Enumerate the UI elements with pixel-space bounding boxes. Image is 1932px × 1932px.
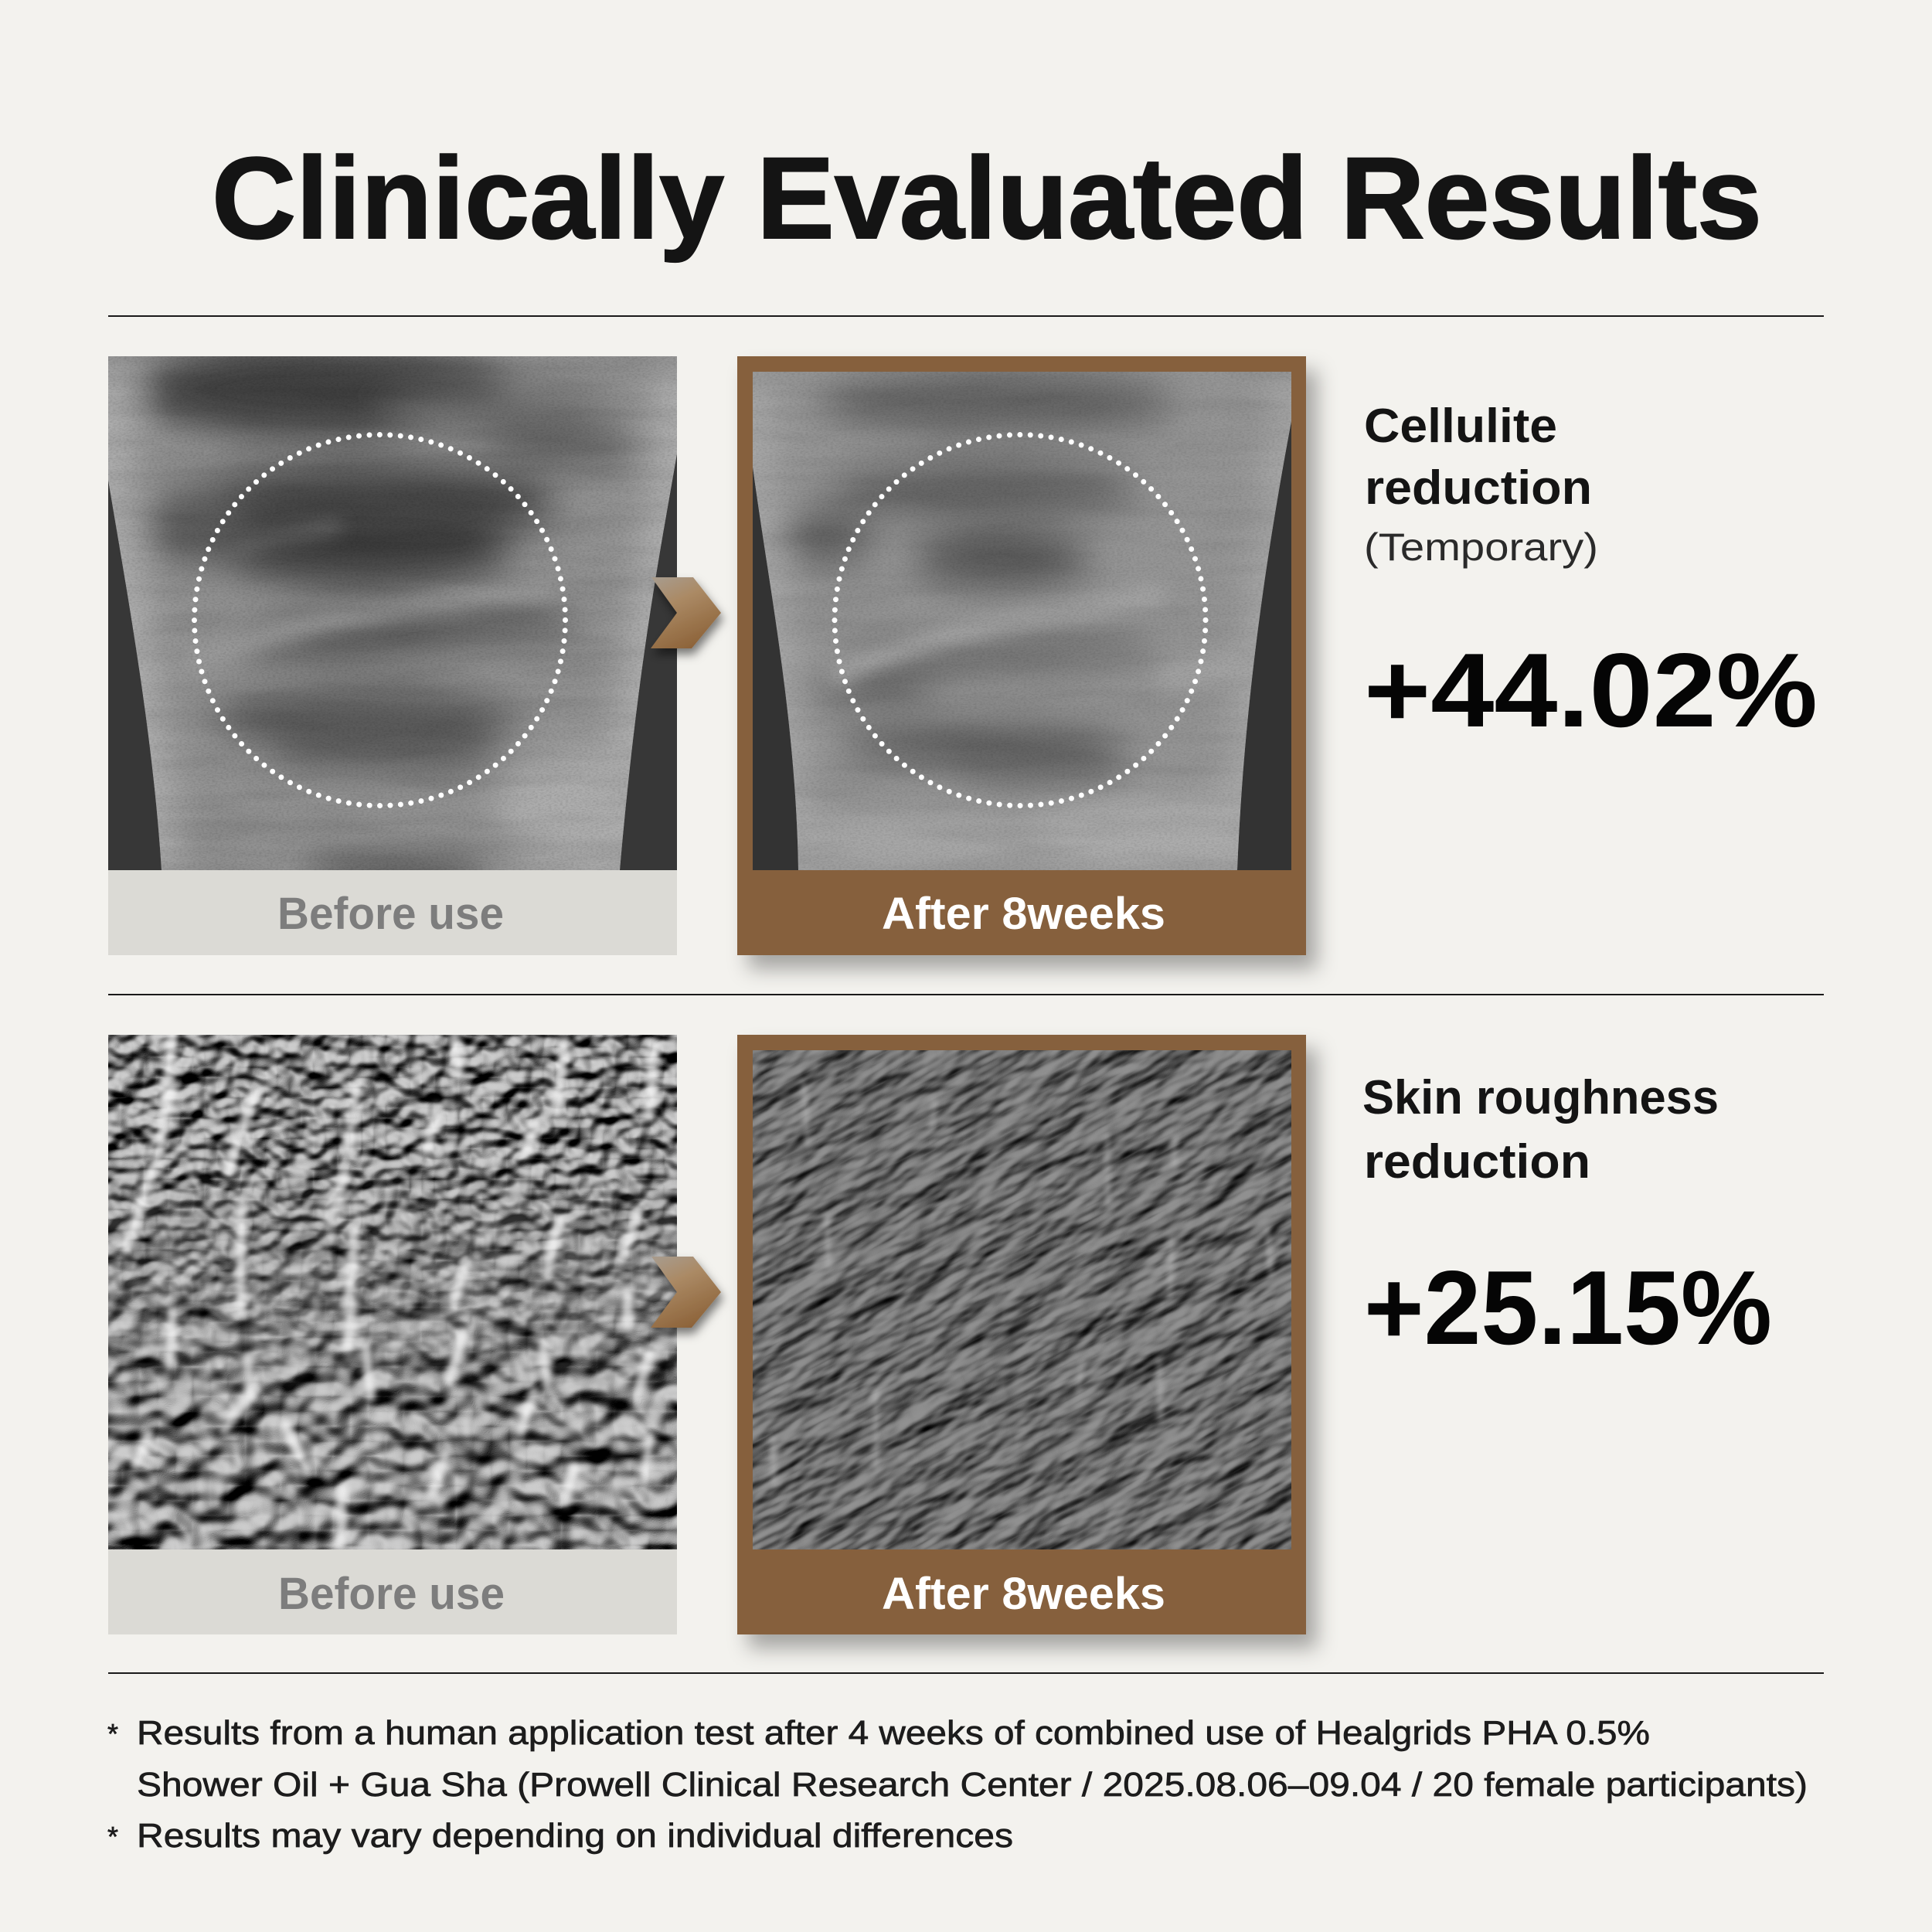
before panel: roughness bbox=[108, 1035, 677, 1634]
title: Clinically Evaluated Results bbox=[212, 133, 1762, 263]
brown frame bbox=[737, 356, 1306, 955]
caption: before use bbox=[108, 870, 677, 955]
footnotes: Results may vary depending on individual differences bbox=[137, 1817, 1013, 1855]
after panel: roughness bbox=[736, 1035, 1329, 1661]
stat: skin roughness reduction bbox=[1362, 1071, 1772, 1366]
panel: skin roughness comparison bbox=[108, 1035, 1776, 1797]
photo: rough skin surface bbox=[108, 1035, 677, 1549]
footnotes: Shower Oil + Gua Sha (Prowell Clinical Research Center / 2025.08.06–09.04 / 20 female participants) bbox=[137, 1766, 1808, 1804]
caption: before use bbox=[108, 1549, 677, 1634]
stat: skin roughness reduction: Skin roughness bbox=[1362, 1071, 1719, 1124]
footnotes: Results from a human application test after 4 weeks of combined use of Healgrids PHA 0.5% bbox=[137, 1714, 1650, 1752]
photo: thigh after 8 weeks bbox=[753, 372, 1298, 873]
footnotes: * bbox=[107, 1718, 118, 1750]
caption: before use: Before use bbox=[277, 889, 504, 939]
arrow bbox=[651, 577, 721, 648]
footnotes: * bbox=[107, 1821, 118, 1852]
brown frame bbox=[737, 1035, 1306, 1634]
dotted circle bbox=[835, 434, 1206, 805]
stat: skin roughness reduction: +25.15% bbox=[1364, 1249, 1772, 1366]
stat: skin roughness reduction: reduction bbox=[1364, 1135, 1590, 1189]
caption: after 8 weeks: After 8weeks bbox=[882, 1569, 1165, 1619]
stat: cellulite reduction: +44.02% bbox=[1364, 631, 1818, 749]
photo: thigh before use bbox=[108, 345, 680, 889]
stat: cellulite reduction: (Temporary) bbox=[1364, 526, 1598, 569]
panel: cellulite comparison bbox=[108, 345, 1818, 955]
dotted circle bbox=[195, 434, 566, 805]
arrow bbox=[651, 1257, 721, 1328]
stat: cellulite reduction: Cellulite bbox=[1364, 400, 1557, 453]
caption: after 8 weeks: After 8weeks bbox=[882, 889, 1165, 939]
photo: smoothed skin surface bbox=[753, 1050, 1291, 1549]
after panel: cellulite bbox=[737, 356, 1306, 955]
before panel: cellulite bbox=[108, 345, 680, 955]
stat: cellulite reduction bbox=[1364, 400, 1818, 749]
caption: before use: Before use bbox=[278, 1569, 505, 1619]
footnotes bbox=[107, 1714, 1808, 1855]
stat: cellulite reduction: reduction bbox=[1365, 461, 1592, 515]
